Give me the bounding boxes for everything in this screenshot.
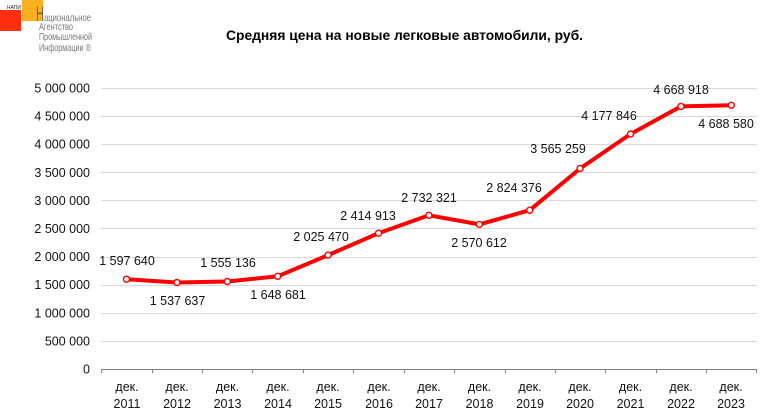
y axis labels: 2 500 000 <box>34 222 90 236</box>
logo: НАПИ <box>7 5 21 11</box>
data labels: 1 555 136 <box>200 256 256 270</box>
x axis labels: дек. <box>568 380 592 394</box>
data labels: 2 824 376 <box>486 181 542 195</box>
logo <box>0 0 92 54</box>
x axis labels: дек. <box>669 380 693 394</box>
line series: average price <box>126 105 731 282</box>
data labels <box>99 83 754 308</box>
data labels: 1 537 637 <box>150 294 205 308</box>
data labels: 2 025 470 <box>293 230 349 244</box>
data labels: 4 177 846 <box>581 109 637 123</box>
y axis labels: 0 <box>83 362 90 376</box>
x axis labels: 2012 <box>163 397 191 411</box>
data labels: 1 597 640 <box>99 254 155 268</box>
logo: Агентство <box>39 21 73 33</box>
x axis labels: 2011 <box>114 397 140 411</box>
x axis labels: 2014 <box>264 397 292 411</box>
y axis labels: 4 500 000 <box>34 110 90 124</box>
y axis labels: 2 000 000 <box>34 250 90 264</box>
data labels: 4 688 580 <box>698 117 754 131</box>
x axis labels: дек. <box>316 380 340 394</box>
y axis labels: 3 500 000 <box>34 166 90 180</box>
data labels: 2 570 612 <box>451 236 507 250</box>
x axis labels: 2018 <box>466 397 493 411</box>
data labels: 4 668 918 <box>653 83 709 97</box>
x axis labels: 2019 <box>516 397 544 411</box>
x axis labels: дек. <box>518 380 542 394</box>
y axis labels: 1 500 000 <box>34 278 90 292</box>
y axis labels: 1 000 000 <box>34 306 90 320</box>
x axis labels: 2013 <box>214 397 241 411</box>
x axis labels: дек. <box>115 380 139 394</box>
x axis labels: дек. <box>619 380 642 394</box>
x axis labels: 2021 <box>617 397 644 411</box>
x axis labels: 2017 <box>415 397 443 411</box>
data labels: 2 732 321 <box>401 191 457 205</box>
x axis labels: 2016 <box>365 397 393 411</box>
logo: Н <box>36 3 44 26</box>
y axis labels <box>34 82 90 376</box>
x axis labels: дек. <box>266 380 290 394</box>
data labels: 1 648 681 <box>250 288 306 302</box>
x axis line and ticks <box>101 369 757 373</box>
logo: ациональное <box>44 12 91 24</box>
title: Средняя цена на новые легковые автомобили, руб. <box>226 28 583 43</box>
data labels: 2 414 913 <box>340 209 396 223</box>
logo: Промышленной <box>39 31 92 43</box>
x axis labels: 2015 <box>314 397 342 411</box>
y axis labels: 5 000 000 <box>34 82 90 96</box>
y axis labels: 3 000 000 <box>34 194 90 208</box>
y axis labels: 500 000 <box>45 334 90 348</box>
x axis labels: дек. <box>367 380 391 394</box>
x axis labels: дек. <box>468 380 491 394</box>
x axis labels: дек. <box>417 380 441 394</box>
logo: Информации ® <box>39 42 91 54</box>
x axis labels: 2022 <box>667 397 695 411</box>
x axis labels <box>114 380 745 411</box>
x axis labels: дек. <box>165 380 189 394</box>
x axis labels: 2020 <box>566 397 594 411</box>
data labels: 3 565 259 <box>530 142 586 156</box>
data point markers <box>124 102 734 286</box>
y axis labels: 4 000 000 <box>34 138 90 152</box>
x axis labels: дек. <box>719 380 743 394</box>
x axis labels: дек. <box>216 380 239 394</box>
x axis labels: 2023 <box>717 397 745 411</box>
